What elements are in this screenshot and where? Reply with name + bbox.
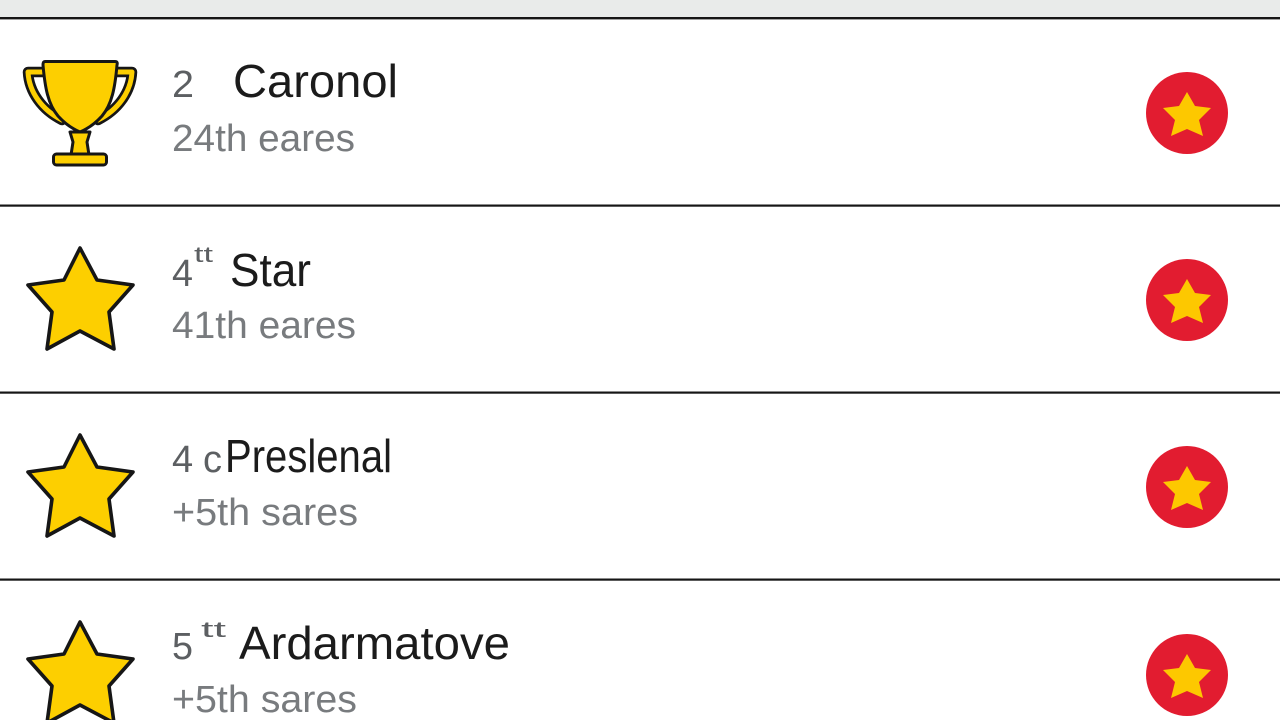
rank label: 4c — [172, 439, 222, 481]
row 2: Star — [28, 242, 1228, 349]
rank label: 2 — [172, 64, 194, 106]
name: Star — [230, 244, 311, 296]
rank label: 5 — [172, 626, 193, 668]
badge: red star — [1146, 634, 1228, 716]
subtitle: +5th sares — [172, 679, 357, 720]
row 3: Preslenal — [28, 430, 1228, 536]
badge: red star — [1146, 446, 1228, 528]
rank label: 4 — [172, 253, 193, 295]
row 1: Caronol — [28, 55, 1228, 165]
subtitle: 24th eares — [172, 118, 355, 160]
rank suffix: tt — [194, 242, 213, 267]
icon: star — [28, 622, 133, 720]
badge: red star — [1146, 259, 1228, 341]
name: Caronol — [233, 55, 398, 107]
icon: star — [28, 248, 133, 349]
rank suffix: tt — [201, 617, 226, 642]
name: Ardarmatove — [239, 617, 510, 669]
name: Preslenal — [225, 430, 392, 482]
subtitle: +5th sares — [172, 492, 358, 534]
icon: trophy — [28, 62, 132, 165]
icon: star — [28, 435, 133, 536]
row 4: Ardarmatove — [28, 617, 1228, 720]
badge: red star — [1146, 72, 1228, 154]
subtitle: 41th eares — [172, 305, 356, 347]
top header strip — [0, 0, 1280, 18]
